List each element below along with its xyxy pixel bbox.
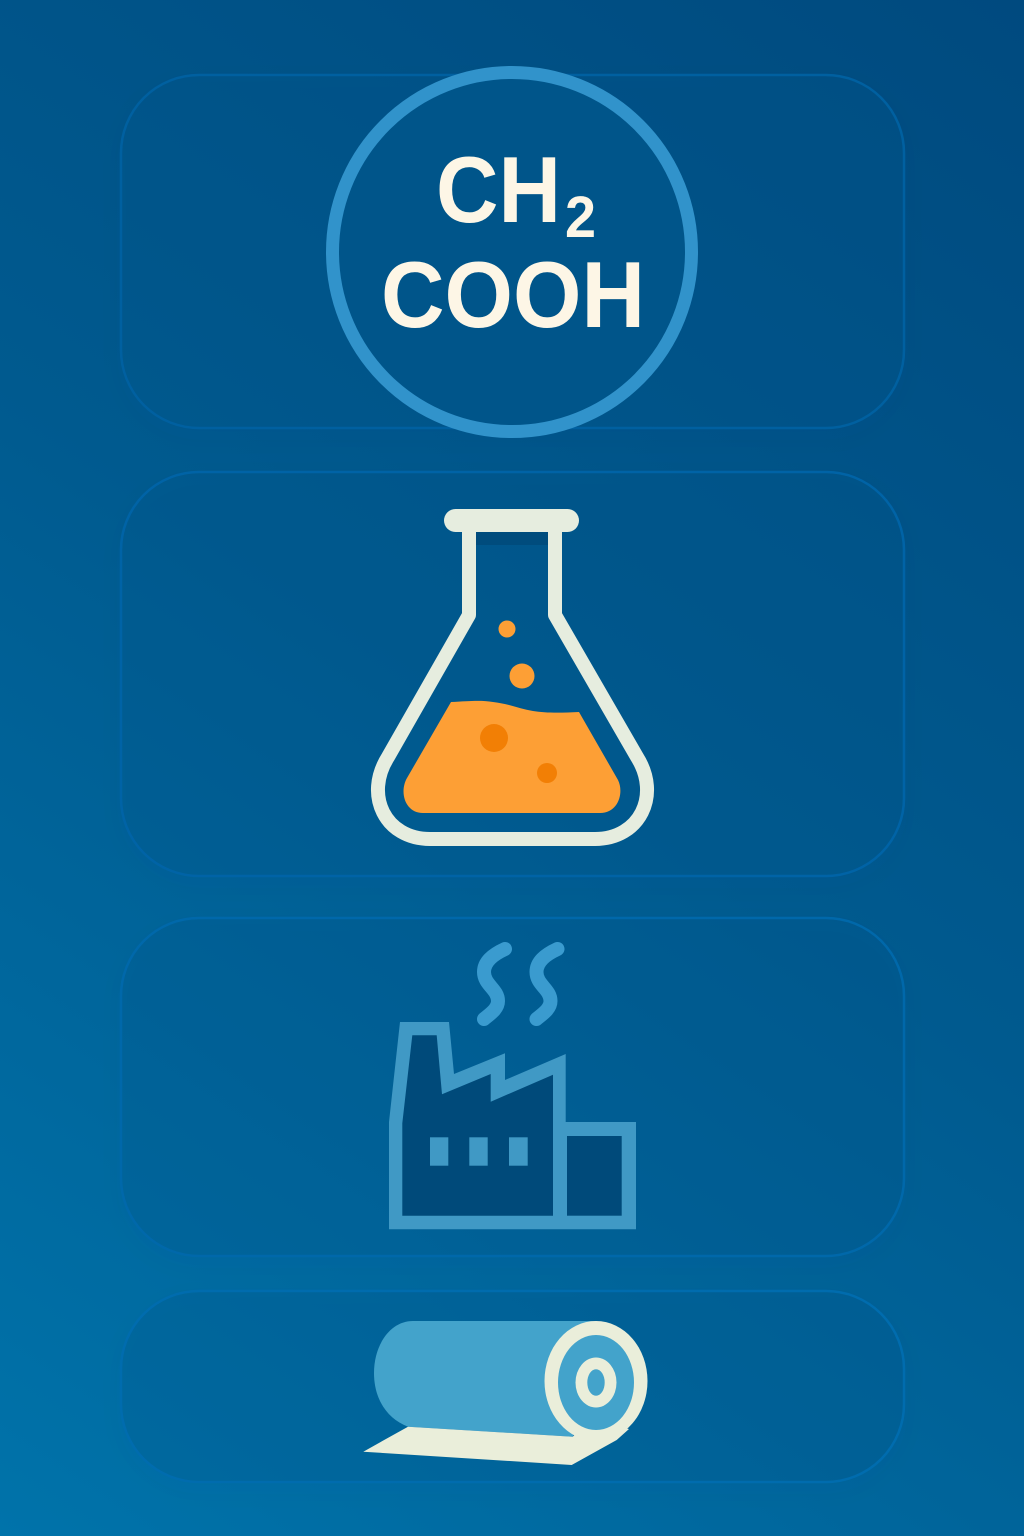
neck shade xyxy=(476,532,549,545)
panel: flask xyxy=(121,472,904,876)
icon: fabric roll xyxy=(363,1321,648,1465)
windows xyxy=(430,1137,528,1166)
formula: CH2: CH xyxy=(436,137,561,242)
circle ring xyxy=(332,72,692,432)
formula: COOH: COOH xyxy=(381,242,645,347)
annex xyxy=(567,1136,622,1216)
unrolled sheet xyxy=(363,1420,629,1465)
flask outline xyxy=(378,530,647,839)
liquid xyxy=(404,701,620,813)
roll end xyxy=(544,1321,648,1441)
main hall xyxy=(402,1035,553,1216)
flask lip xyxy=(444,509,579,532)
panel: factory xyxy=(121,918,904,1256)
formula: CH2: 2 xyxy=(565,185,596,250)
bubbles xyxy=(480,620,557,783)
molecule badge xyxy=(332,72,692,432)
panel: fabric roll xyxy=(121,1291,904,1482)
smoke xyxy=(484,949,558,1019)
panel: molecule xyxy=(121,75,904,428)
icon: factory xyxy=(389,949,636,1229)
roll body xyxy=(374,1321,595,1437)
factory body xyxy=(389,1022,636,1229)
icon: flask xyxy=(378,509,647,839)
